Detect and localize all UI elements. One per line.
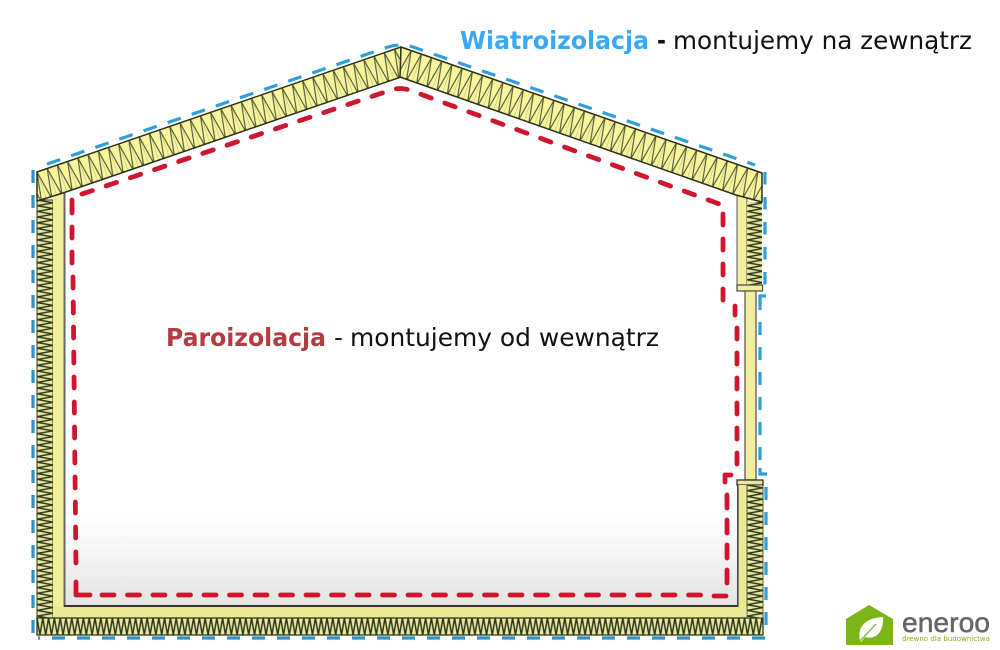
window sill [737, 480, 763, 485]
logo tagline: drewno dla budownictwa [902, 635, 990, 643]
logo: eneroo [846, 605, 990, 645]
logo wordmark: eneroo [902, 607, 990, 638]
left wall: insulation [37, 200, 53, 618]
house cross-section [37, 47, 763, 635]
window frame [745, 291, 756, 480]
left wall: yellow layer [53, 193, 64, 618]
icon: house with leaf [846, 605, 893, 645]
right wall lower: insulation [747, 485, 763, 618]
floor: insulation [37, 618, 763, 635]
label: vapour barrier: Paroizolacja [166, 323, 326, 352]
roof right slope [400, 47, 762, 202]
label: wind barrier: montujemy na zewnątrz [673, 26, 972, 55]
left wall: inner line [64, 192, 66, 607]
right wall upper: yellow layer [737, 195, 747, 285]
right wall upper: insulation [747, 202, 762, 285]
wind barrier dashed line (blue) [33, 45, 767, 640]
label: vapour barrier [166, 323, 659, 352]
floor: yellow layer [53, 607, 746, 618]
label: wind barrier [460, 26, 972, 55]
right wall lower: inner line [737, 485, 739, 607]
floor: inner line [64, 605, 738, 607]
vapour barrier dashed line (red) [72, 88, 737, 596]
interior floor shading [65, 515, 738, 605]
window head [737, 285, 762, 291]
roof left slope [37, 47, 401, 201]
label: wind barrier: - [657, 26, 666, 55]
label: vapour barrier: montujemy od wewnątrz [350, 323, 659, 352]
right wall lower: yellow layer [738, 485, 748, 607]
label: vapour barrier: - [334, 323, 343, 352]
label: wind barrier: Wiatroizolacja [460, 26, 649, 55]
